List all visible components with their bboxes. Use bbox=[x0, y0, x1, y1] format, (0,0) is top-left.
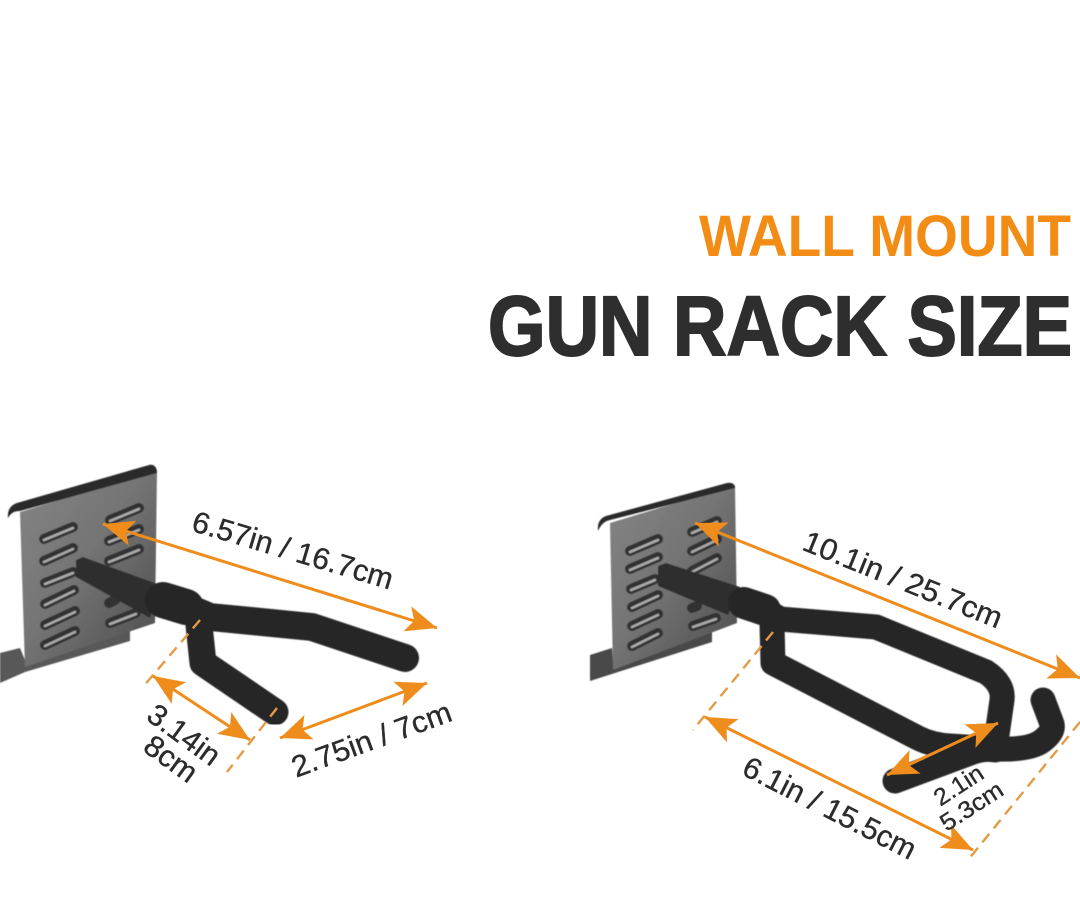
mounting plate bbox=[20, 470, 157, 667]
label: 3.14in 8cm: 3.14in bbox=[141, 698, 226, 773]
upper prong bbox=[765, 610, 1002, 735]
label: 2.1in 5.3cm: 2.1in bbox=[929, 760, 989, 812]
arrow: 2.1in width bbox=[887, 723, 998, 775]
panel: short rack bbox=[0, 465, 456, 790]
heading: wall mount: WALL MOUNT bbox=[699, 204, 1071, 269]
label: 3.14in 8cm: 8cm bbox=[137, 729, 204, 790]
support arm bbox=[76, 557, 160, 618]
support arm bbox=[658, 563, 740, 615]
bottom flange bbox=[0, 628, 130, 683]
lower prong bbox=[772, 625, 1052, 749]
rubber sleeve bbox=[163, 600, 186, 607]
bottom flange bbox=[590, 630, 712, 681]
hook tail bbox=[895, 749, 995, 781]
dimension lines bbox=[693, 632, 1080, 860]
arrow: 6.57in length bbox=[103, 524, 437, 628]
title bbox=[488, 204, 1072, 373]
dimension lines bbox=[142, 620, 277, 772]
label: 2.1in 5.3cm bbox=[929, 760, 1009, 837]
long rack product illustration bbox=[590, 483, 1052, 781]
long prong bbox=[186, 607, 405, 658]
label: 6.1in: 6.1in / 15.5cm bbox=[737, 751, 921, 866]
label: 2.75in: 2.75in / 7cm bbox=[287, 696, 456, 784]
arrow: 2.75in gap bbox=[280, 683, 427, 738]
top lip bbox=[598, 483, 735, 531]
short prong bbox=[199, 625, 275, 712]
label: 2.1in 5.3cm: 5.3cm bbox=[935, 776, 1009, 837]
arrow: 6.1in length bbox=[705, 717, 973, 850]
mounting plate bbox=[610, 485, 737, 670]
plate slots bbox=[44, 508, 139, 646]
panel: long rack bbox=[590, 483, 1080, 866]
rubber sleeve bbox=[744, 603, 765, 610]
arrow: 3.14in length bbox=[153, 676, 250, 740]
top lip bbox=[8, 465, 157, 518]
short rack product illustration bbox=[0, 465, 405, 712]
arrow: 10.1in length bbox=[695, 523, 1080, 678]
label: 10.1in: 10.1in / 25.7cm bbox=[798, 525, 1007, 635]
label: 6.57in: 6.57in / 16.7cm bbox=[188, 506, 397, 596]
plate slots bbox=[630, 521, 717, 647]
